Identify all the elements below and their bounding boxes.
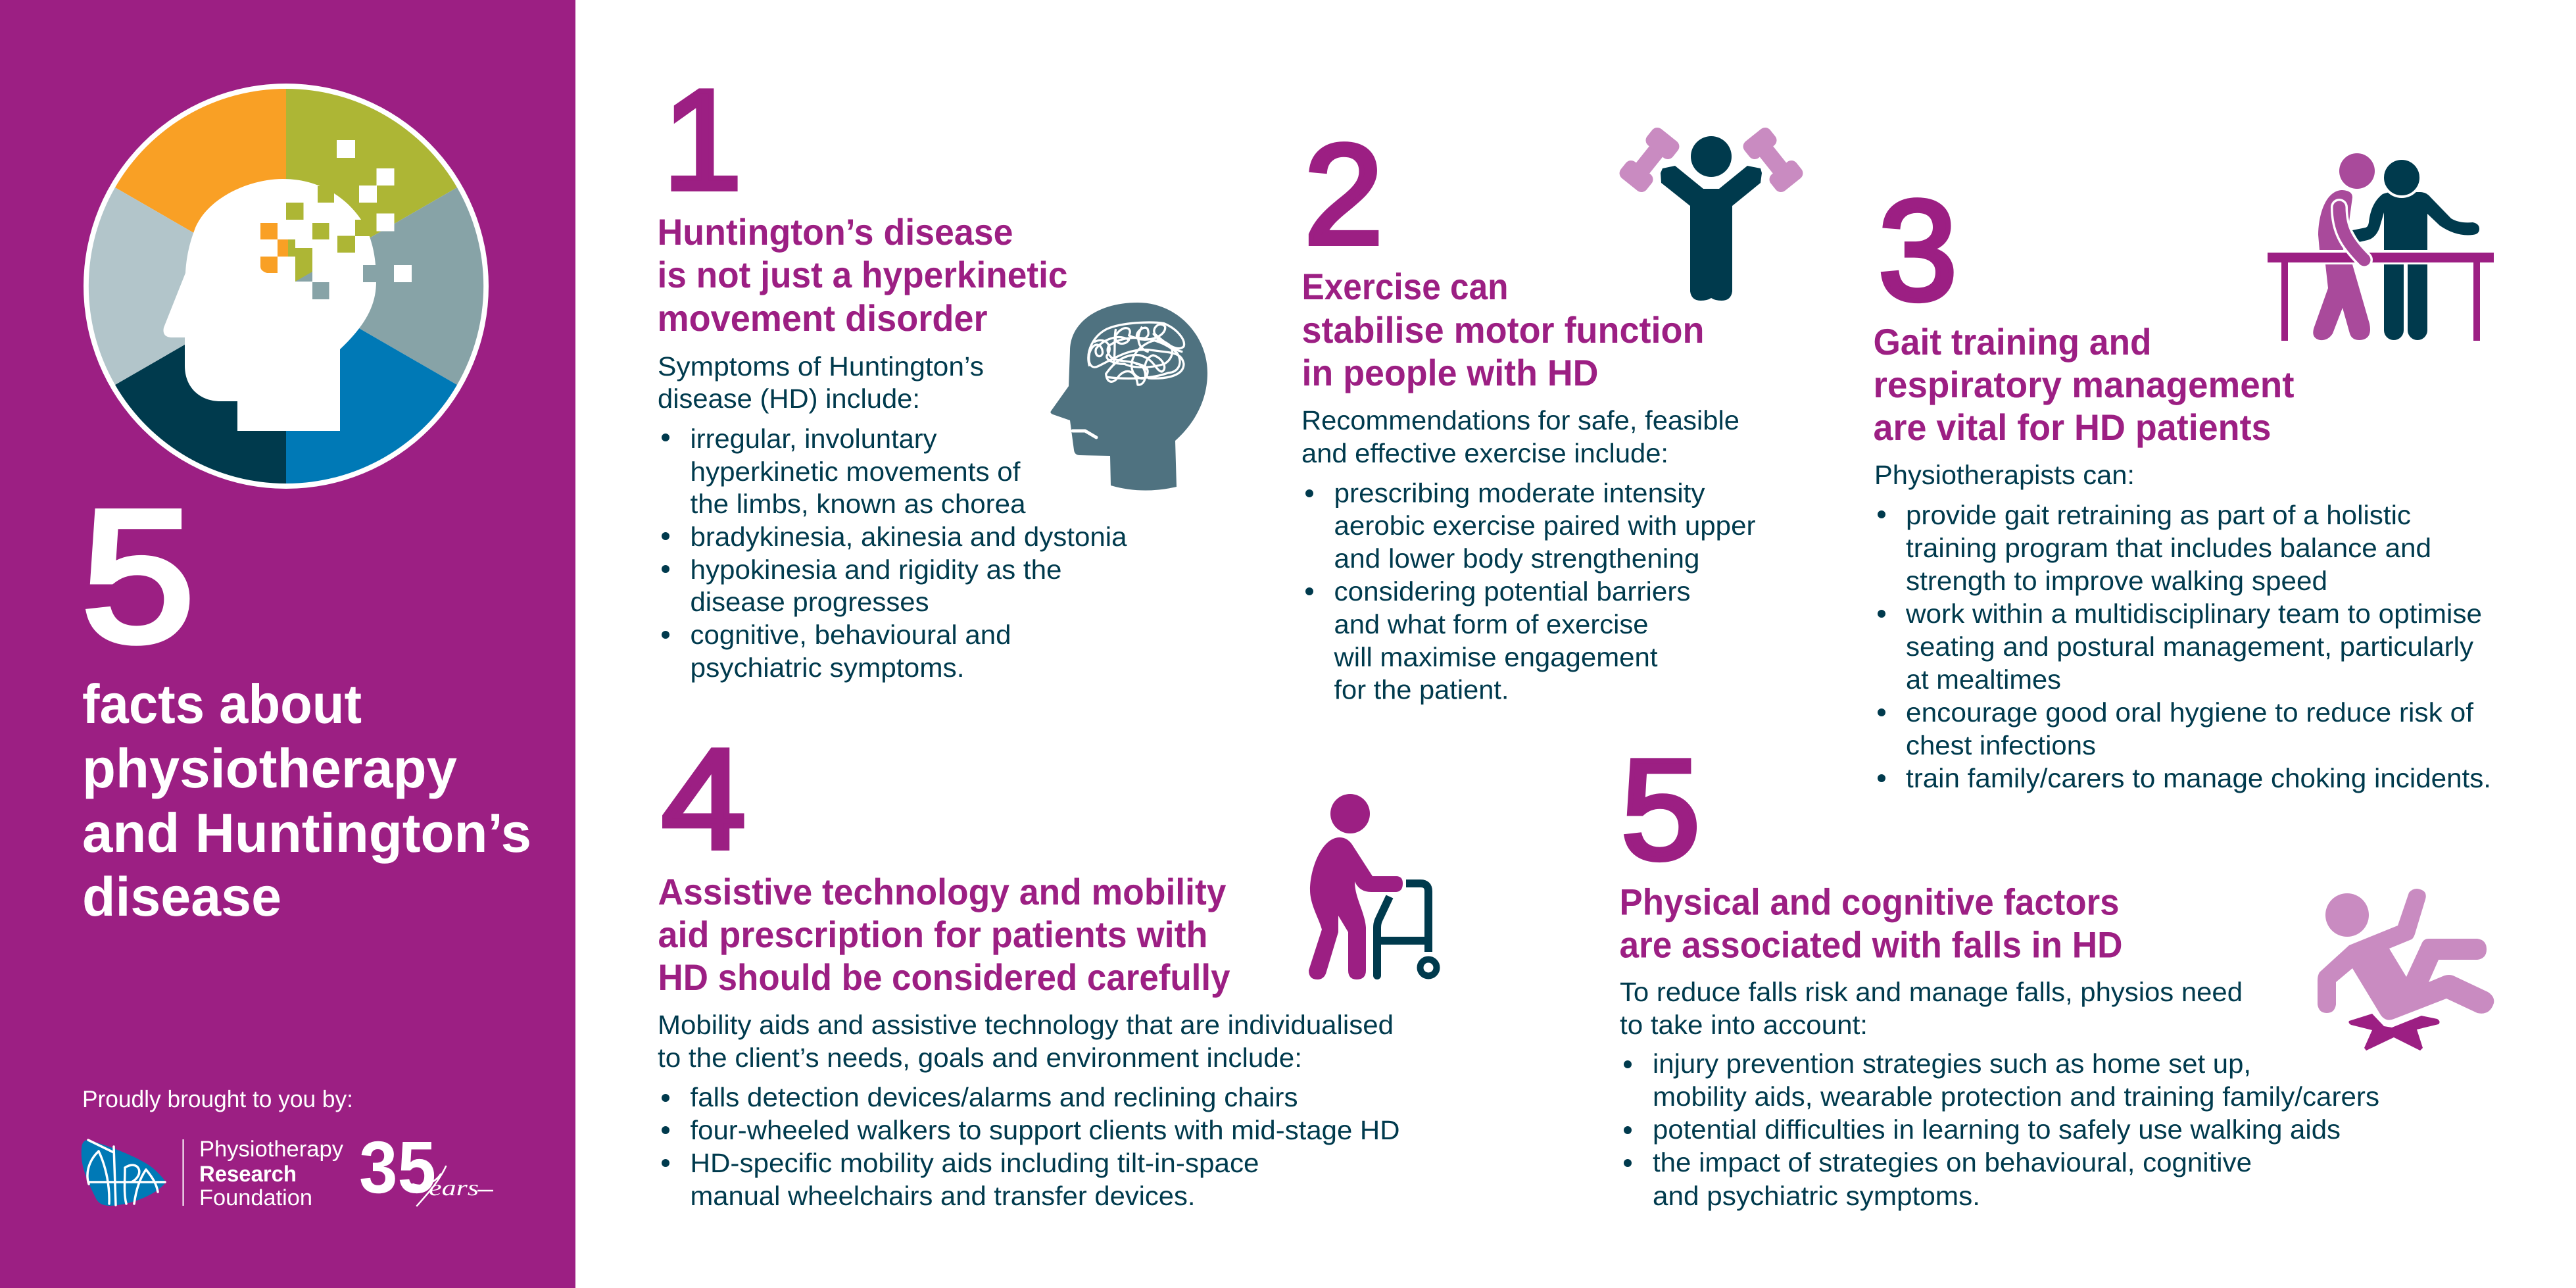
logo text: Physiotherapy Research Foundation (199, 1137, 343, 1210)
intro text 2: and effective exercise include: (1301, 438, 1668, 468)
bullet list 2: considering potential barriers (1334, 576, 1690, 607)
intro text 5 (1620, 977, 2243, 1040)
logo text: Physiotherapy Research Foundation: Research (199, 1162, 297, 1187)
bullet list 1 (662, 424, 1127, 683)
number 2: 2 (1304, 114, 1383, 274)
intro text 4 (658, 1010, 1394, 1073)
heading 4 (658, 871, 1230, 998)
title (82, 673, 531, 928)
heading 1 (658, 211, 1068, 339)
intro text 3: Physiotherapists can: (1874, 460, 2135, 490)
number 1: 1 (663, 60, 742, 219)
logo text: Physiotherapy Research Foundation: Foundation (199, 1185, 312, 1210)
bullet list 5: mobility aids, wearable protection and training family/carers (1653, 1081, 2379, 1112)
bullet list 1: disease progresses (691, 587, 929, 617)
intro text 1: disease (HD) include: (658, 384, 920, 414)
bullet list 1: cognitive, behavioural and (691, 620, 1011, 650)
icon: head with tangled brain (1050, 303, 1207, 491)
bullet list 3: work within a multidisciplinary team to optimise (1905, 599, 2482, 629)
icon: person lifting dumbbells (1617, 125, 1805, 301)
panel: fact 4 (658, 719, 1436, 1211)
bullet list 4 (662, 1082, 1399, 1211)
logo: APA (82, 1140, 166, 1206)
bullet list 2: will maximise engagement (1333, 642, 1658, 672)
panel: fact 1 (658, 60, 1207, 683)
bullet list 3: training program that includes balance and (1906, 533, 2431, 563)
heading 3 (1873, 321, 2294, 448)
heading 3: respiratory management (1873, 364, 2294, 405)
intro text 4: to the client’s needs, goals and environment include: (658, 1043, 1302, 1073)
bullet list 1: hypokinesia and rigidity as the (691, 555, 1061, 585)
bullet list 5 (1624, 1049, 2379, 1211)
title: physiotherapy (82, 737, 457, 799)
bullet list 5: potential difficulties in learning to safely use walking aids (1653, 1114, 2341, 1145)
bullet list 2 (1305, 478, 1756, 705)
panel: fact 5 (1619, 730, 2494, 1211)
bullet list 2: aerobic exercise paired with upper (1334, 510, 1756, 541)
heading 2: stabilise motor function (1302, 309, 1705, 351)
intro text 5: to take into account: (1620, 1010, 1868, 1040)
title: and Huntington’s (82, 802, 531, 864)
icon: person with walker (1309, 794, 1436, 979)
icon: gait training at parallel bars (2268, 153, 2494, 341)
heading 4: HD should be considered carefully (658, 956, 1230, 998)
number 5: 5 (1621, 730, 1700, 889)
intro text 1: Symptoms of Huntington’s (658, 351, 984, 382)
bullet list 2: for the patient. (1334, 675, 1509, 705)
bullet list 2: and lower body strengthening (1334, 543, 1699, 574)
logo: 35 years: 35 (359, 1126, 436, 1208)
number 3: 3 (1878, 170, 1957, 330)
bullet list 5: the impact of strategies on behavioural, cognitive (1653, 1147, 2252, 1177)
logo: 35 years (359, 1126, 493, 1208)
bullet list 2: and what form of exercise (1334, 609, 1648, 639)
heading 3: Gait training and (1873, 321, 2152, 362)
bullet list 1: hyperkinetic movements of (691, 457, 1021, 487)
intro text 1 (658, 351, 984, 414)
intro text 5: To reduce falls risk and manage falls, physios need (1620, 977, 2243, 1007)
bullet list 3: encourage good oral hygiene to reduce risk of (1906, 697, 2474, 728)
heading 1: movement disorder (658, 297, 988, 339)
bullet list 1: bradykinesia, akinesia and dystonia (691, 522, 1127, 552)
bullet list 1: psychiatric symptoms. (691, 653, 964, 683)
bullet list 3: at mealtimes (1906, 664, 2061, 695)
bullet list 1: irregular, involuntary (691, 424, 937, 454)
title: disease (82, 866, 281, 928)
heading 4: aid prescription for patients with (658, 914, 1207, 955)
bullet list 4: four-wheeled walkers to support clients with mid-stage HD (691, 1115, 1399, 1145)
bullet list 4: manual wheelchairs and transfer devices. (691, 1181, 1196, 1211)
bullet list 3: train family/carers to manage choking incidents. (1906, 763, 2491, 793)
bullet list 4: falls detection devices/alarms and reclining chairs (691, 1082, 1298, 1112)
divider (183, 1139, 184, 1206)
bullet list 1: the limbs, known as chorea (691, 489, 1026, 519)
icon: person falling (2318, 889, 2494, 1051)
bullet list 3: seating and postural management, particularly (1906, 632, 2474, 662)
heading 5: Physical and cognitive factors (1619, 881, 2119, 922)
title: facts about (82, 673, 362, 735)
bullet list 3 (1878, 500, 2491, 793)
bullet list 5: and psychiatric symptoms. (1653, 1181, 1980, 1211)
heading 4: Assistive technology and mobility (658, 871, 1226, 912)
logo text: Physiotherapy Research Foundation: Physiotherapy (199, 1137, 343, 1162)
heading 3: are vital for HD patients (1873, 407, 2272, 448)
intro text 2 (1301, 405, 1739, 468)
intro text 4: Mobility aids and assistive technology that are individualised (658, 1010, 1394, 1040)
panel: left sidebar (0, 0, 575, 1288)
logo: 35 years: ears (429, 1176, 479, 1201)
big number five: 5 (82, 472, 195, 681)
panel: fact 2 (1301, 114, 1805, 705)
bullet list 5: injury prevention strategies such as home set up, (1653, 1049, 2251, 1079)
heading 2: Exercise can (1302, 266, 1509, 307)
number 4: 4 (662, 719, 746, 878)
heading 5: are associated with falls in HD (1619, 924, 2123, 966)
heading 5 (1619, 881, 2123, 966)
heading 1: is not just a hyperkinetic (658, 254, 1068, 295)
bullet list 3: strength to improve walking speed (1906, 566, 2327, 596)
bullet list 2: prescribing moderate intensity (1334, 478, 1705, 508)
bullet list 4: HD-specific mobility aids including tilt-in-space (691, 1148, 1259, 1178)
icon: segmented circle with head (84, 84, 489, 489)
bullet list 3: chest infections (1906, 730, 2096, 760)
heading 2 (1302, 266, 1705, 393)
sponsor text: Proudly brought to you by: (82, 1085, 353, 1112)
intro text 2: Recommendations for safe, feasible (1301, 405, 1739, 435)
heading 2: in people with HD (1302, 352, 1598, 393)
panel: fact 3 (1873, 153, 2494, 793)
bullet list 3: provide gait retraining as part of a holistic (1906, 500, 2411, 530)
heading 1: Huntington’s disease (658, 211, 1013, 253)
